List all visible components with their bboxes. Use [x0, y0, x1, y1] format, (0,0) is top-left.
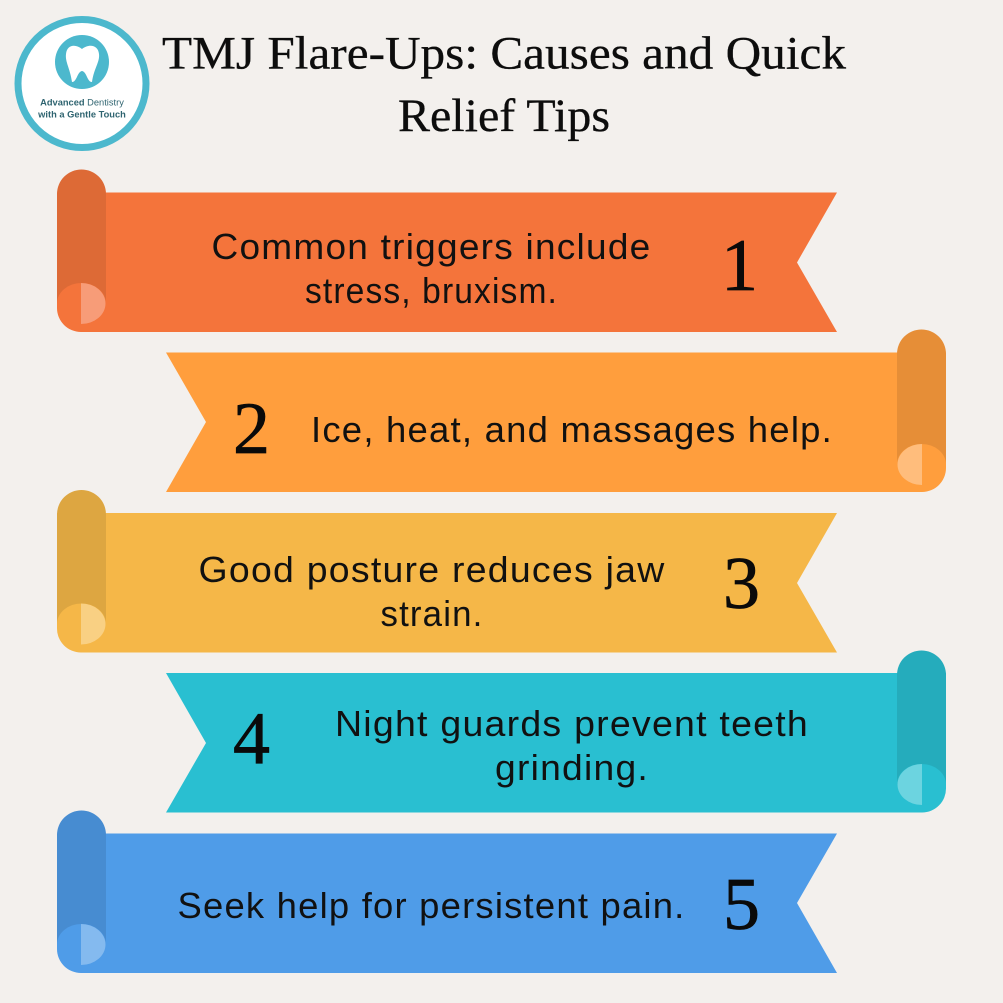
text: night guards [335, 703, 809, 788]
text: triggers: Common triggers include [212, 226, 652, 267]
ribbon 5: seek help [57, 810, 837, 973]
text: posture: Good posture reduces jaw [198, 549, 666, 590]
text: triggers: stress, bruxism. [305, 270, 558, 311]
number 4: 4 [233, 698, 270, 780]
title [162, 28, 847, 142]
icon: tooth [55, 35, 109, 89]
ribbon 3: posture [57, 490, 837, 652]
text: posture [198, 549, 666, 634]
text: night guards: Night guards prevent teeth [335, 703, 809, 744]
text: ice and heat: Ice, heat, and massages help. [311, 409, 833, 450]
logo badge [18, 20, 146, 148]
ribbon 1: triggers [57, 170, 837, 332]
text: night guards: grinding. [495, 747, 649, 788]
text: triggers [212, 226, 652, 311]
number 5: 5 [723, 864, 760, 946]
logo badge: with a Gentle Touch [37, 110, 126, 120]
text: posture: strain. [380, 593, 484, 634]
logo text: Advanced Dentistry [40, 98, 124, 108]
title: TMJ Flare-Ups: Causes and Quick [162, 28, 847, 80]
ribbon 2: ice and heat [166, 330, 946, 492]
ribbon 4: night guards [166, 650, 946, 812]
title: Relief Tips [398, 90, 610, 142]
text: seek help: Seek help for persistent pain. [178, 885, 686, 926]
number 3: 3 [723, 543, 760, 625]
number 1: 1 [721, 225, 758, 307]
number 2: 2 [233, 388, 270, 470]
